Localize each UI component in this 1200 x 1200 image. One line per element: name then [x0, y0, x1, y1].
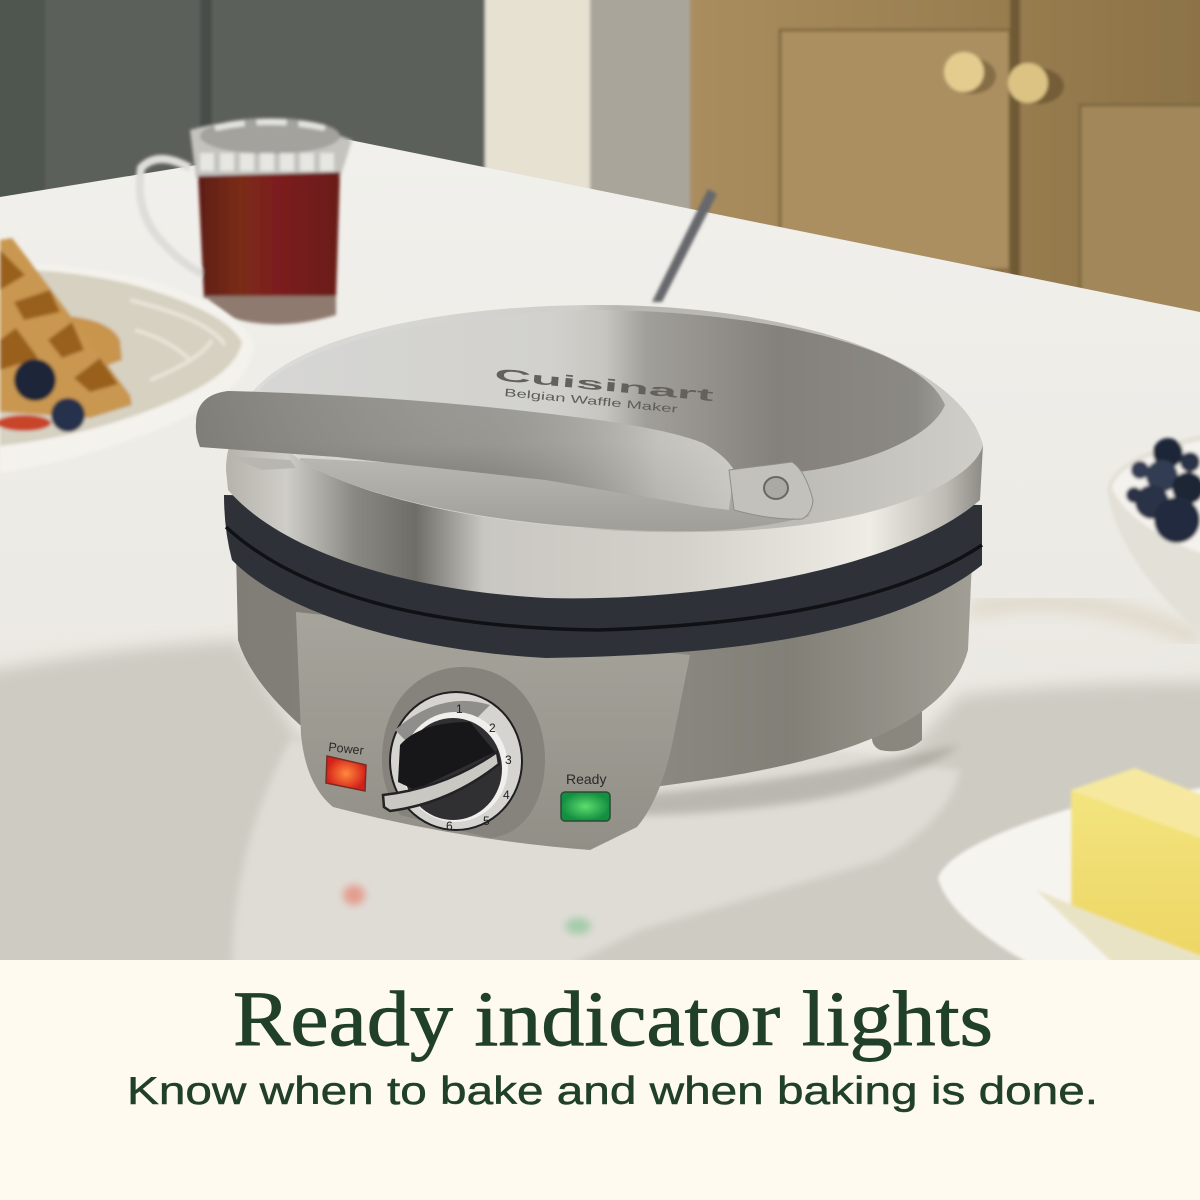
- reflections of lights: [343, 885, 591, 934]
- base housing: [236, 550, 972, 800]
- marble table top: [0, 140, 1200, 1000]
- dial numbers: 2: [489, 721, 496, 735]
- brand logo: Cuisinart: [494, 365, 715, 405]
- bowl of blueberries: [1107, 430, 1200, 650]
- dial numbers: 5: [483, 814, 490, 828]
- handle recess: [300, 458, 810, 531]
- foot: [872, 708, 922, 751]
- handle hinge: [729, 462, 813, 519]
- dial numbers: [446, 702, 512, 833]
- ready indicator light: [561, 792, 610, 821]
- control panel: [296, 612, 690, 850]
- waffle maker: [196, 305, 983, 970]
- lid inner disc: [258, 310, 945, 472]
- power indicator light: [326, 756, 366, 791]
- temperature dial: [383, 691, 523, 833]
- fork handle: [652, 189, 717, 302]
- subtitle: Know when to bake and when baking is done.: [127, 1070, 1098, 1113]
- dial pointer: [383, 752, 499, 811]
- lid top: [240, 305, 983, 532]
- reflection on marble: [232, 740, 960, 970]
- icon: cabinet knobs: [944, 52, 1064, 104]
- dial numbers: 6: [446, 819, 453, 833]
- power indicator label: Power: [328, 740, 364, 758]
- plate with waffles: [0, 238, 254, 473]
- ready indicator label: Ready: [566, 771, 606, 787]
- caption panel: [0, 960, 1200, 1200]
- dial housing: [382, 667, 545, 838]
- dial numbers: 3: [505, 753, 512, 767]
- handle: [196, 391, 813, 519]
- dark non-stick bands: [224, 495, 982, 658]
- butter dish: [938, 768, 1200, 980]
- title: Ready indicator lights: [233, 975, 993, 1062]
- dial numbers: 1: [456, 702, 463, 716]
- dial numbers: 4: [503, 788, 510, 802]
- shadow under appliance: [640, 745, 960, 815]
- model name: Belgian Waffle Maker: [504, 387, 679, 416]
- icon: blueberries: [0, 359, 85, 432]
- lid rim: [226, 400, 983, 598]
- background: kitchen wall and cabinets: [0, 0, 1200, 320]
- syrup pitcher: [140, 118, 352, 324]
